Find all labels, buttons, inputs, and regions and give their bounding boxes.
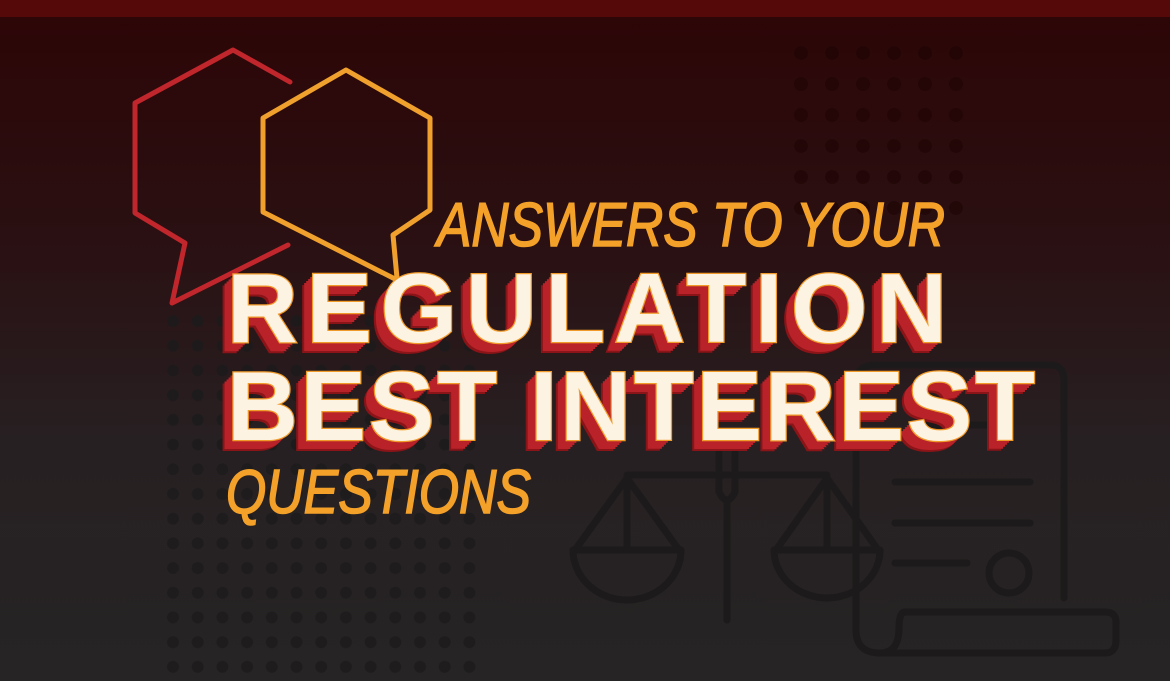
top bar (0, 0, 1170, 17)
title: regulation best interest: BEST INTEREST (224, 354, 1032, 464)
title: regulation best interest: REGULATION (222, 258, 942, 368)
title: regulation best interest: BEST INTEREST (222, 356, 1030, 466)
icon: orange speech bubble (263, 70, 430, 280)
title: regulation best interest: REGULATION (224, 256, 944, 366)
subtitle: questions: QUESTIONS (226, 458, 531, 527)
title: regulation best interest: REGULATION (218, 262, 938, 372)
title: regulation best interest: REGULATION (220, 260, 940, 370)
title: regulation best interest: BEST INTEREST (216, 362, 1024, 472)
dot grid top right (789, 41, 975, 227)
icon: red speech bubble (135, 50, 290, 303)
title: regulation best interest: BEST INTEREST (227, 351, 1035, 461)
icon: scales and scroll (573, 365, 1116, 653)
title: regulation best interest (216, 253, 1035, 472)
title: regulation best interest: BEST INTEREST (220, 358, 1028, 468)
subtitle: answers to your: ANSWERS TO YOUR (434, 191, 945, 260)
title: regulation best interest: REGULATION (227, 253, 947, 363)
title: regulation best interest: BEST INTEREST (218, 360, 1026, 470)
dot grid bottom left (161, 309, 483, 673)
title: regulation best interest: REGULATION (216, 264, 936, 374)
